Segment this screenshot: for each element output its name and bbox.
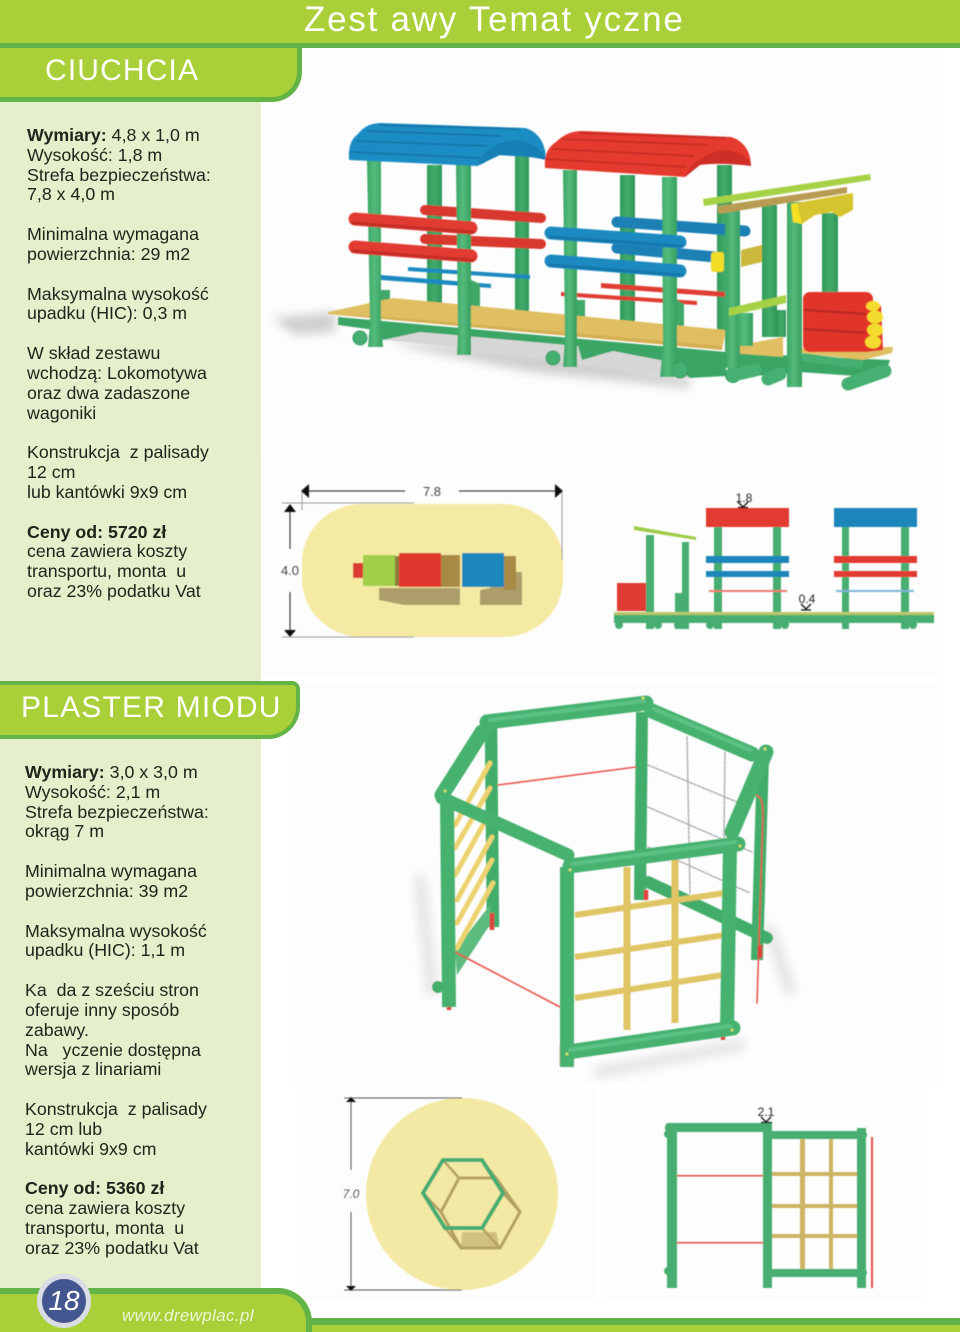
left wheel bbox=[432, 981, 444, 993]
page number badge: 18 bbox=[48, 1285, 80, 1316]
loco front posts bbox=[725, 202, 802, 387]
red roof bbox=[545, 131, 751, 177]
image panel backgrounds bbox=[262, 50, 943, 1300]
blue roof bbox=[349, 123, 546, 166]
plan wagons bbox=[399, 553, 441, 587]
loco back posts bbox=[762, 205, 838, 337]
loco frame log bbox=[802, 357, 863, 365]
wagon side plates bbox=[377, 280, 684, 345]
back bars wagon 2 bbox=[617, 222, 745, 257]
hexagon top bbox=[423, 1160, 503, 1228]
rope anchors bbox=[449, 890, 760, 1066]
climbing grid bbox=[575, 860, 725, 1030]
tab: CIUCHCIA bbox=[0, 48, 302, 102]
footer tab bbox=[0, 1288, 312, 1332]
loco red boiler bbox=[803, 292, 873, 352]
loco yellow side bars bbox=[741, 245, 762, 267]
website: www.drewplac.pl bbox=[122, 1306, 254, 1325]
red ropes bbox=[455, 767, 763, 1007]
frame highlights bbox=[490, 701, 750, 1050]
loco yellow panel bbox=[791, 193, 853, 224]
back bars wagon 1 bbox=[425, 210, 541, 244]
height label: 2.1 bbox=[758, 1105, 775, 1119]
side roofs bbox=[706, 508, 789, 527]
height labels: 1.8 bbox=[736, 491, 753, 505]
front bars wagon 1 bbox=[353, 219, 473, 260]
footer band bbox=[0, 1318, 960, 1332]
side wagons bbox=[614, 527, 934, 629]
safety circle bbox=[366, 1098, 558, 1290]
deck bbox=[328, 298, 893, 360]
text block: PLASTER MIODU specification: Wymiary: 3,0 x 3,0 m Wysokość: 2,1 m Strefa bezpieczeństwa: okrąg 7 m Minimalna wymagana powierzchnia: 39 m2 Maksymalna wysokość upadku (HIC): 1,1 m Ka da z sześciu stron oferuje inny sposób zabawy. Na yczenie dostępna wersja z linariami Konstrukcja z palisady 12 cm lub kantówki 9x9 cm Ceny od: 5360 zł cena zawiera koszty transportu, monta u oraz 23% podatku Vat bbox=[25, 762, 209, 1258]
blue seats bbox=[381, 267, 530, 288]
red seats bbox=[561, 283, 726, 305]
dimension labels: 7.8 bbox=[423, 484, 441, 499]
shadow frame bbox=[441, 1178, 520, 1248]
side ropes bbox=[677, 1137, 873, 1288]
title: Zest awy Temat yczne bbox=[304, 0, 685, 39]
ladder rungs bbox=[455, 763, 493, 948]
dimension labels: 4.0 bbox=[281, 563, 299, 578]
text block: CIUCHCIA specification: Wymiary: 4,8 x 1,0 m Wysokość: 1,8 m Strefa bezpieczeństwa: 7,8 x 4,0 m Minimalna wymagana powierzchnia: 29 m2 Maksymalna wysokość upadku (HIC): 0,3 m W skład zestawu wchodzą: Lokomotywa oraz dwa zadaszone wagoniki Konstrukcja z palisady 12 cm lub kantówki 9x9 cm Ceny od: 5720 zł cena zawiera koszty transportu, monta u oraz 23% podatku Vat bbox=[27, 125, 211, 601]
side bars bbox=[706, 556, 789, 577]
illustration: hexagon frame bbox=[420, 696, 790, 1072]
loco green bench bbox=[729, 295, 786, 316]
loco roof plank bbox=[717, 187, 847, 214]
train ground shadow bbox=[272, 312, 690, 388]
under-frame bbox=[338, 317, 890, 378]
dimension arrows bbox=[284, 484, 563, 637]
left column background upper bbox=[0, 100, 261, 682]
locomotive bbox=[703, 174, 883, 387]
side grid bbox=[772, 1139, 858, 1269]
side frame bbox=[664, 1123, 867, 1288]
top banner bbox=[0, 0, 960, 48]
dimension labels bbox=[281, 484, 441, 578]
frame bolts bbox=[444, 696, 766, 1056]
dimension lines bbox=[282, 490, 562, 637]
side loco bbox=[634, 526, 696, 540]
plan loco bbox=[353, 563, 363, 578]
left column background lower bbox=[0, 738, 261, 1292]
tab: PLASTER MIODU bbox=[0, 681, 300, 739]
heading: PLASTER MIODU: PLASTER MIODU bbox=[21, 691, 282, 724]
plan shadows bbox=[379, 572, 522, 605]
diameter label: 7.0 bbox=[343, 1187, 360, 1201]
diameter dimension bbox=[344, 1098, 462, 1290]
wheels bbox=[353, 331, 740, 382]
front posts wagons bbox=[367, 160, 677, 377]
front frame bbox=[442, 703, 766, 1067]
back posts wagon 2 bbox=[620, 165, 732, 331]
lower left plate bbox=[455, 905, 493, 975]
page number badge bbox=[37, 1274, 91, 1328]
side view: train bbox=[614, 491, 934, 629]
side view: hexagon bbox=[664, 1105, 873, 1288]
plan view: hexagon bbox=[343, 1097, 558, 1291]
frame shadow bbox=[420, 880, 790, 1072]
loco wheel logs bbox=[733, 370, 885, 384]
illustration: train playset bbox=[272, 123, 893, 388]
plan view: train bbox=[281, 484, 563, 637]
height labels bbox=[736, 491, 816, 606]
height labels: 0.4 bbox=[799, 592, 816, 606]
rear posts and beams bbox=[491, 712, 767, 960]
net bbox=[648, 737, 752, 907]
safety zone bbox=[302, 504, 563, 637]
back posts wagon 1 bbox=[427, 150, 529, 312]
heading: CIUCHCIA: CIUCHCIA bbox=[45, 54, 199, 87]
front bars wagon 2 bbox=[550, 233, 682, 275]
